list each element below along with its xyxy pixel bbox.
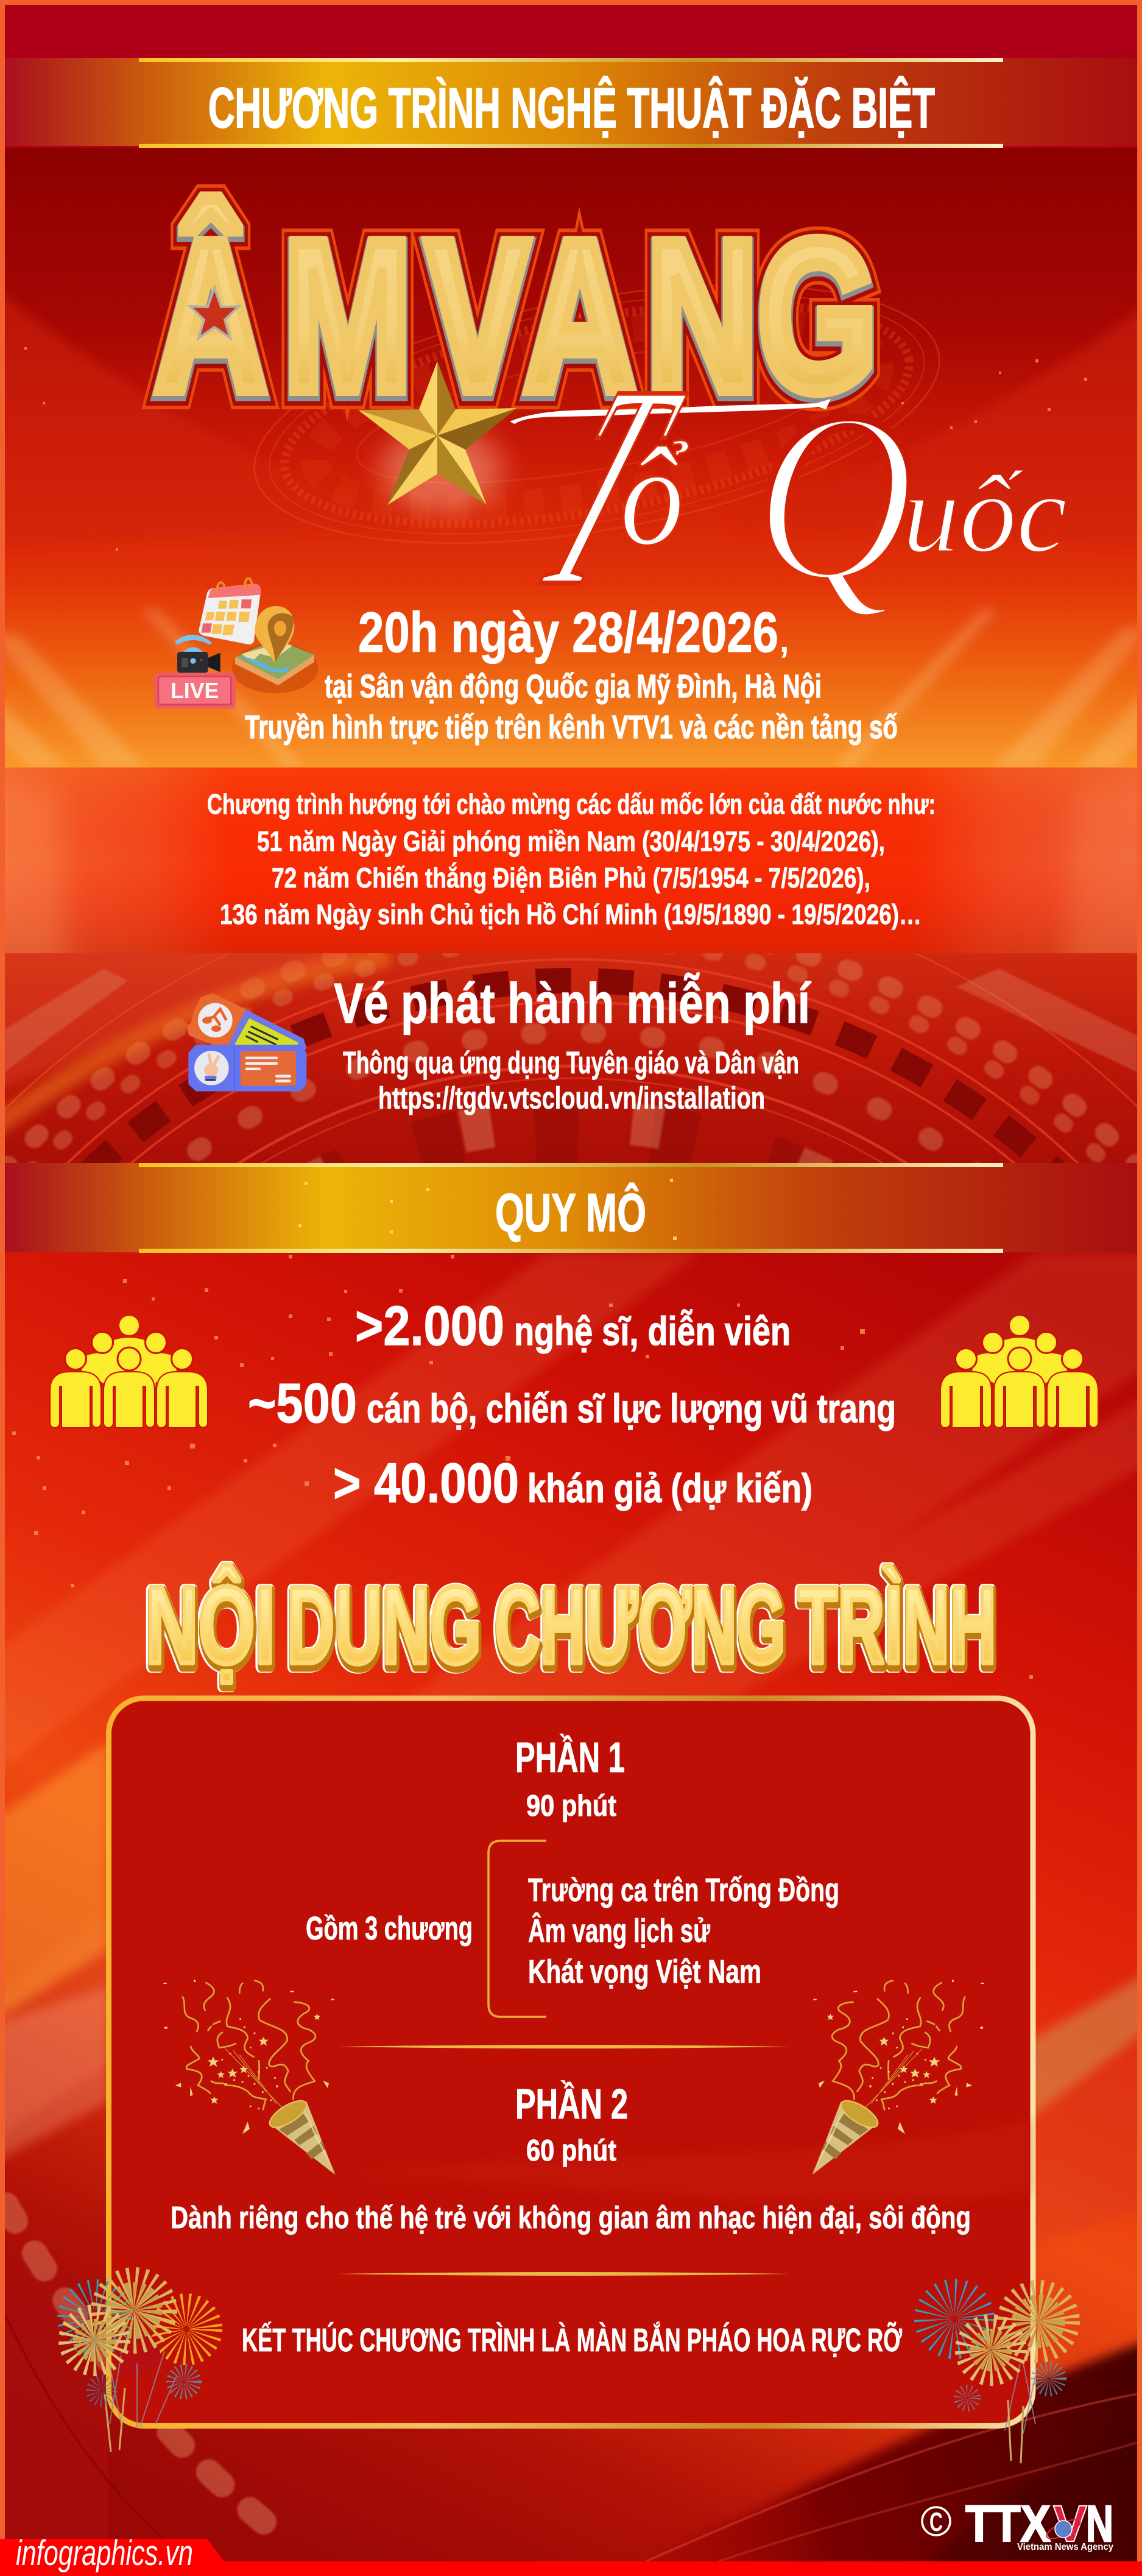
logo: Tổ Quốc script bbox=[503, 326, 1067, 646]
scale figures: cán bộ, chiến sĩ lực lượng vũ trang bbox=[367, 1386, 896, 1431]
logo: TTXVN: N bbox=[1086, 2495, 1113, 2552]
sparkles bbox=[12, 347, 1087, 1679]
heading: program content: DUNG bbox=[288, 1568, 482, 1690]
heading: free tickets: Vé phát hành miễn phí bbox=[334, 972, 811, 1035]
icon: calendar, map pin and live camera bbox=[154, 578, 318, 708]
icon: fireworks right bbox=[932, 2297, 1059, 2463]
part 2: PHẦN 2 bbox=[515, 2080, 628, 2128]
logo: Âm Vang: ÂMVANG bbox=[155, 199, 877, 438]
scale figures: ~500 bbox=[248, 1372, 357, 1434]
icon: people group right bbox=[940, 1316, 1098, 1428]
panel: free tickets with drum pattern bbox=[5, 953, 1137, 1163]
logo: Tổ Quốc script: Q bbox=[754, 362, 914, 632]
bronze drum ellipse behind logo bbox=[235, 240, 959, 588]
site name: infographics.vn bbox=[16, 2533, 193, 2573]
icon: calendar, map pin and live camera: LIVE bbox=[171, 678, 219, 703]
logo: TTXVN: V bbox=[1053, 2495, 1087, 2552]
part 1: 90 phút bbox=[526, 1790, 616, 1823]
icon: golden star bbox=[358, 361, 517, 512]
heading: program content: NỘI bbox=[146, 1567, 275, 1690]
logo: TTXVN: Vietnam News Agency bbox=[1017, 2542, 1113, 2552]
icon: small star in A bbox=[190, 288, 239, 338]
icon: tickets bbox=[187, 993, 306, 1092]
event date and place: , bbox=[778, 613, 790, 661]
icon: people group left bbox=[50, 1316, 208, 1428]
panel: anniversaries bbox=[5, 768, 1137, 953]
chapter list: Âm vang lịch sử bbox=[528, 1912, 711, 1949]
scale figures: >2.000 bbox=[355, 1295, 504, 1357]
logo: Âm Vang: ÂMVANG bbox=[155, 199, 877, 438]
logo: Tổ Quốc script: ổ bbox=[620, 417, 689, 575]
logo: Âm Vang: ÂMVANG bbox=[155, 199, 877, 438]
bottom bar with site name bbox=[0, 2533, 1142, 2576]
event date and place: 20h ngày 28/4/2026 bbox=[358, 601, 778, 664]
chapter list: Trường ca trên Trống Đồng bbox=[528, 1872, 839, 1908]
icon: party popper left bbox=[163, 1980, 336, 2175]
part 1 bbox=[515, 1734, 625, 1823]
part 2 bbox=[515, 2080, 628, 2167]
logo: Tổ Quốc script: uốc bbox=[903, 451, 1067, 576]
icon: fireworks left bbox=[72, 2288, 206, 2452]
panel: anniversaries: 136 năm Ngày sinh Chủ tịch Hồ Chí Minh (19/5/1890 - 19/5/2026)… bbox=[220, 898, 922, 930]
event date and place bbox=[245, 601, 898, 746]
how to get tickets bbox=[343, 1045, 799, 1115]
heading: program content: DUNG bbox=[287, 1567, 481, 1690]
scale figures: nghệ sĩ, diễn viên bbox=[514, 1308, 791, 1353]
three chapters label: Gồm 3 chương bbox=[306, 1910, 473, 1947]
logo: TTXVN: C bbox=[929, 2507, 943, 2537]
panel: anniversaries: 51 năm Ngày Giải phóng miền Nam (30/4/1975 - 30/4/2026), bbox=[257, 825, 885, 857]
heading: program content: TRÌNH bbox=[799, 1568, 998, 1690]
how to get tickets: https://tgdv.vtscloud.vn/installation bbox=[378, 1081, 765, 1115]
bracket bbox=[488, 1841, 546, 2017]
event date and place: tại Sân vận động Quốc gia Mỹ Đình, Hà Nội bbox=[325, 668, 822, 705]
chapter list bbox=[528, 1872, 839, 1990]
part 2: 60 phút bbox=[526, 2134, 616, 2167]
scale figures: khán giả (dự kiến) bbox=[527, 1466, 812, 1511]
chapter list: Khát vọng Việt Nam bbox=[528, 1953, 761, 1990]
heading: program content: CHƯƠNG bbox=[495, 1567, 786, 1690]
top title band bbox=[5, 58, 1137, 148]
panel: program parts bbox=[108, 1698, 1033, 2426]
logo: Âm Vang: ÂMVANG bbox=[155, 196, 877, 435]
band: scale heading bbox=[5, 1163, 1137, 1253]
logo: TTXVN bbox=[922, 2495, 1113, 2552]
heading: program content bbox=[146, 1564, 998, 1690]
icon: party popper right bbox=[811, 1980, 984, 2175]
panel: anniversaries: 72 năm Chiến thắng Điện Biên Phủ (7/5/1954 - 7/5/2026), bbox=[272, 862, 870, 894]
scale figures bbox=[248, 1295, 896, 1514]
logo: TTXVN: TTX bbox=[965, 2495, 1051, 2552]
heading: program content: NỘI bbox=[147, 1568, 277, 1690]
heading: program content: CHƯƠNG bbox=[496, 1568, 787, 1690]
heading: program content: DUNG bbox=[287, 1564, 481, 1687]
heading: quy mo: QUY MÔ bbox=[495, 1182, 646, 1243]
how to get tickets: Thông qua ứng dụng Tuyên giáo và Dân vận bbox=[343, 1045, 799, 1080]
scale figures: > 40.000 bbox=[333, 1452, 519, 1514]
heading: program content: TRÌNH bbox=[798, 1564, 996, 1687]
event date and place: Truyền hình trực tiếp trên kênh VTV1 và các nền tảng số bbox=[245, 709, 898, 746]
logo: Tổ Quốc script: T bbox=[503, 326, 716, 646]
part 1: PHẦN 1 bbox=[515, 1734, 625, 1781]
heading: program content: CHƯƠNG bbox=[495, 1564, 786, 1687]
divider bbox=[337, 2272, 791, 2276]
heading: program content: TRÌNH bbox=[798, 1567, 996, 1690]
heading: program content: NỘI bbox=[146, 1564, 275, 1687]
divider bbox=[337, 2045, 791, 2048]
